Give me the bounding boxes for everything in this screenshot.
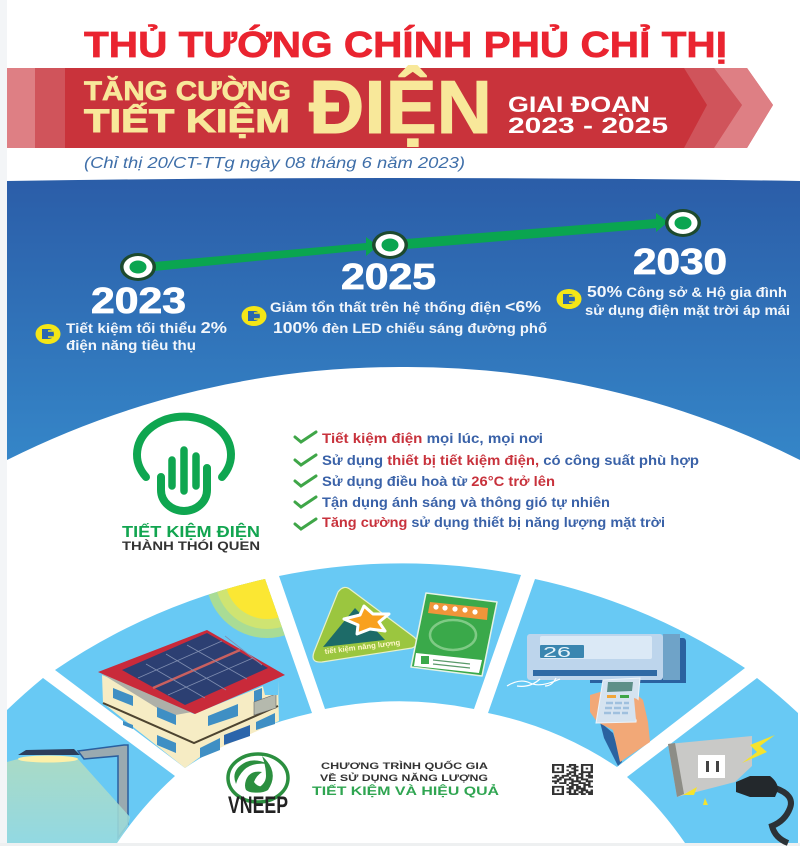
logo text: tiết kiệm điện: TIẾT KIỆM ĐIỆN	[122, 522, 260, 541]
directive reference: (Chỉ thị 20/CT-TTg ngày 08 tháng 6 năm 2023)	[84, 155, 465, 172]
programme text: CHƯƠNG TRÌNH QUỐC GIA	[321, 760, 488, 772]
banner period years: 2023 - 2025	[508, 113, 668, 138]
lamp pole	[78, 745, 128, 838]
item 4: Tận dụng ánh sáng và thông gió tự nhiên	[322, 495, 610, 510]
QR code	[552, 765, 593, 794]
energy rating label	[411, 593, 497, 676]
text: 2030 target: sử dụng điện mặt trời áp mái	[585, 303, 790, 318]
spark: lightning	[742, 735, 775, 763]
timeline chart	[120, 209, 701, 281]
banner heading: điện: ĐIỆN	[309, 65, 492, 149]
checklist	[295, 431, 699, 530]
panel: street lamp	[7, 678, 175, 843]
marker: 2023	[120, 253, 156, 281]
year 2025: 2025	[341, 256, 436, 297]
item 3: Sử dụng điều hoà từ 26°C trở lên	[322, 474, 555, 489]
sun	[208, 579, 285, 638]
icon: plug 2023	[36, 324, 60, 344]
arrow: 2025 to 2030	[406, 213, 668, 249]
spark: small	[683, 787, 708, 805]
text: 2023 target: Tiết kiệm tối thiểu 2%	[66, 320, 227, 337]
year 2030: 2030	[633, 241, 727, 282]
banner heading: tăng cường: TĂNG CƯỜNG	[84, 75, 291, 106]
banner heading: tiết kiệm: TIẾT KIỆM	[84, 103, 290, 139]
logo: VNEEP	[228, 754, 288, 819]
icon: plug 2030	[556, 289, 582, 309]
item 5: Tăng cường sử dụng thiết bị năng lượng mặt trời	[322, 515, 665, 530]
text: 2025 targets: Giảm tổn thất trên hệ thống điện <6%	[270, 299, 541, 316]
light cone	[7, 759, 130, 843]
check icons	[295, 432, 316, 529]
logo text: thành thói quen: THÀNH THÓI QUEN	[122, 538, 260, 553]
icon: plug 2025	[242, 306, 266, 326]
banner	[7, 65, 773, 149]
power cable	[772, 788, 791, 843]
text: 2030 target: 50% Công sở & Hộ gia đình	[587, 284, 787, 301]
item 2: Sử dụng thiết bị tiết kiệm điện, có công suất phù hợp	[322, 453, 699, 468]
badge: energy saving star	[313, 587, 418, 662]
banner period label: GIAI ĐOẠN	[508, 92, 650, 117]
panel: air conditioner	[488, 579, 745, 767]
title: THỦ TƯỚNG CHÍNH PHỦ CHỈ THỊ	[84, 23, 727, 65]
programme text: VỀ SỬ DỤNG NĂNG LƯỢNG	[320, 772, 488, 784]
house	[98, 630, 285, 768]
logo wordmark: VNEEP	[228, 792, 288, 819]
power plug	[736, 776, 778, 797]
text: 2025 targets: 100% đèn LED chiếu sáng đường phố	[273, 320, 547, 337]
panel: wall socket	[627, 678, 798, 843]
programme text: TIẾT KIỆM VÀ HIỆU QUẢ	[312, 785, 499, 798]
ac temperature: 26	[543, 644, 571, 661]
arrow: 2023 to 2025	[154, 237, 378, 271]
marker: 2025	[372, 231, 408, 259]
hand with remote	[590, 678, 650, 766]
year 2023: 2023	[91, 280, 186, 321]
socket plate	[668, 736, 752, 797]
text: 2025 targets	[270, 299, 547, 337]
text: 2023 target	[66, 320, 227, 353]
icon: campaign logo	[137, 417, 231, 511]
marker: 2030	[665, 209, 701, 237]
panel: blue timeline background	[7, 178, 800, 460]
lamp head	[18, 749, 80, 755]
programme text	[312, 760, 499, 798]
text: 2030 target	[585, 284, 790, 318]
panel: energy labels	[279, 563, 521, 709]
text: 2023 target: điện năng tiêu thụ	[66, 338, 196, 353]
item 1: Tiết kiệm điện mọi lúc, mọi nơi	[322, 431, 543, 446]
panel: solar house	[55, 579, 312, 768]
badge caption: tiết kiệm năng lượng	[324, 638, 401, 656]
ac unit	[507, 634, 686, 686]
